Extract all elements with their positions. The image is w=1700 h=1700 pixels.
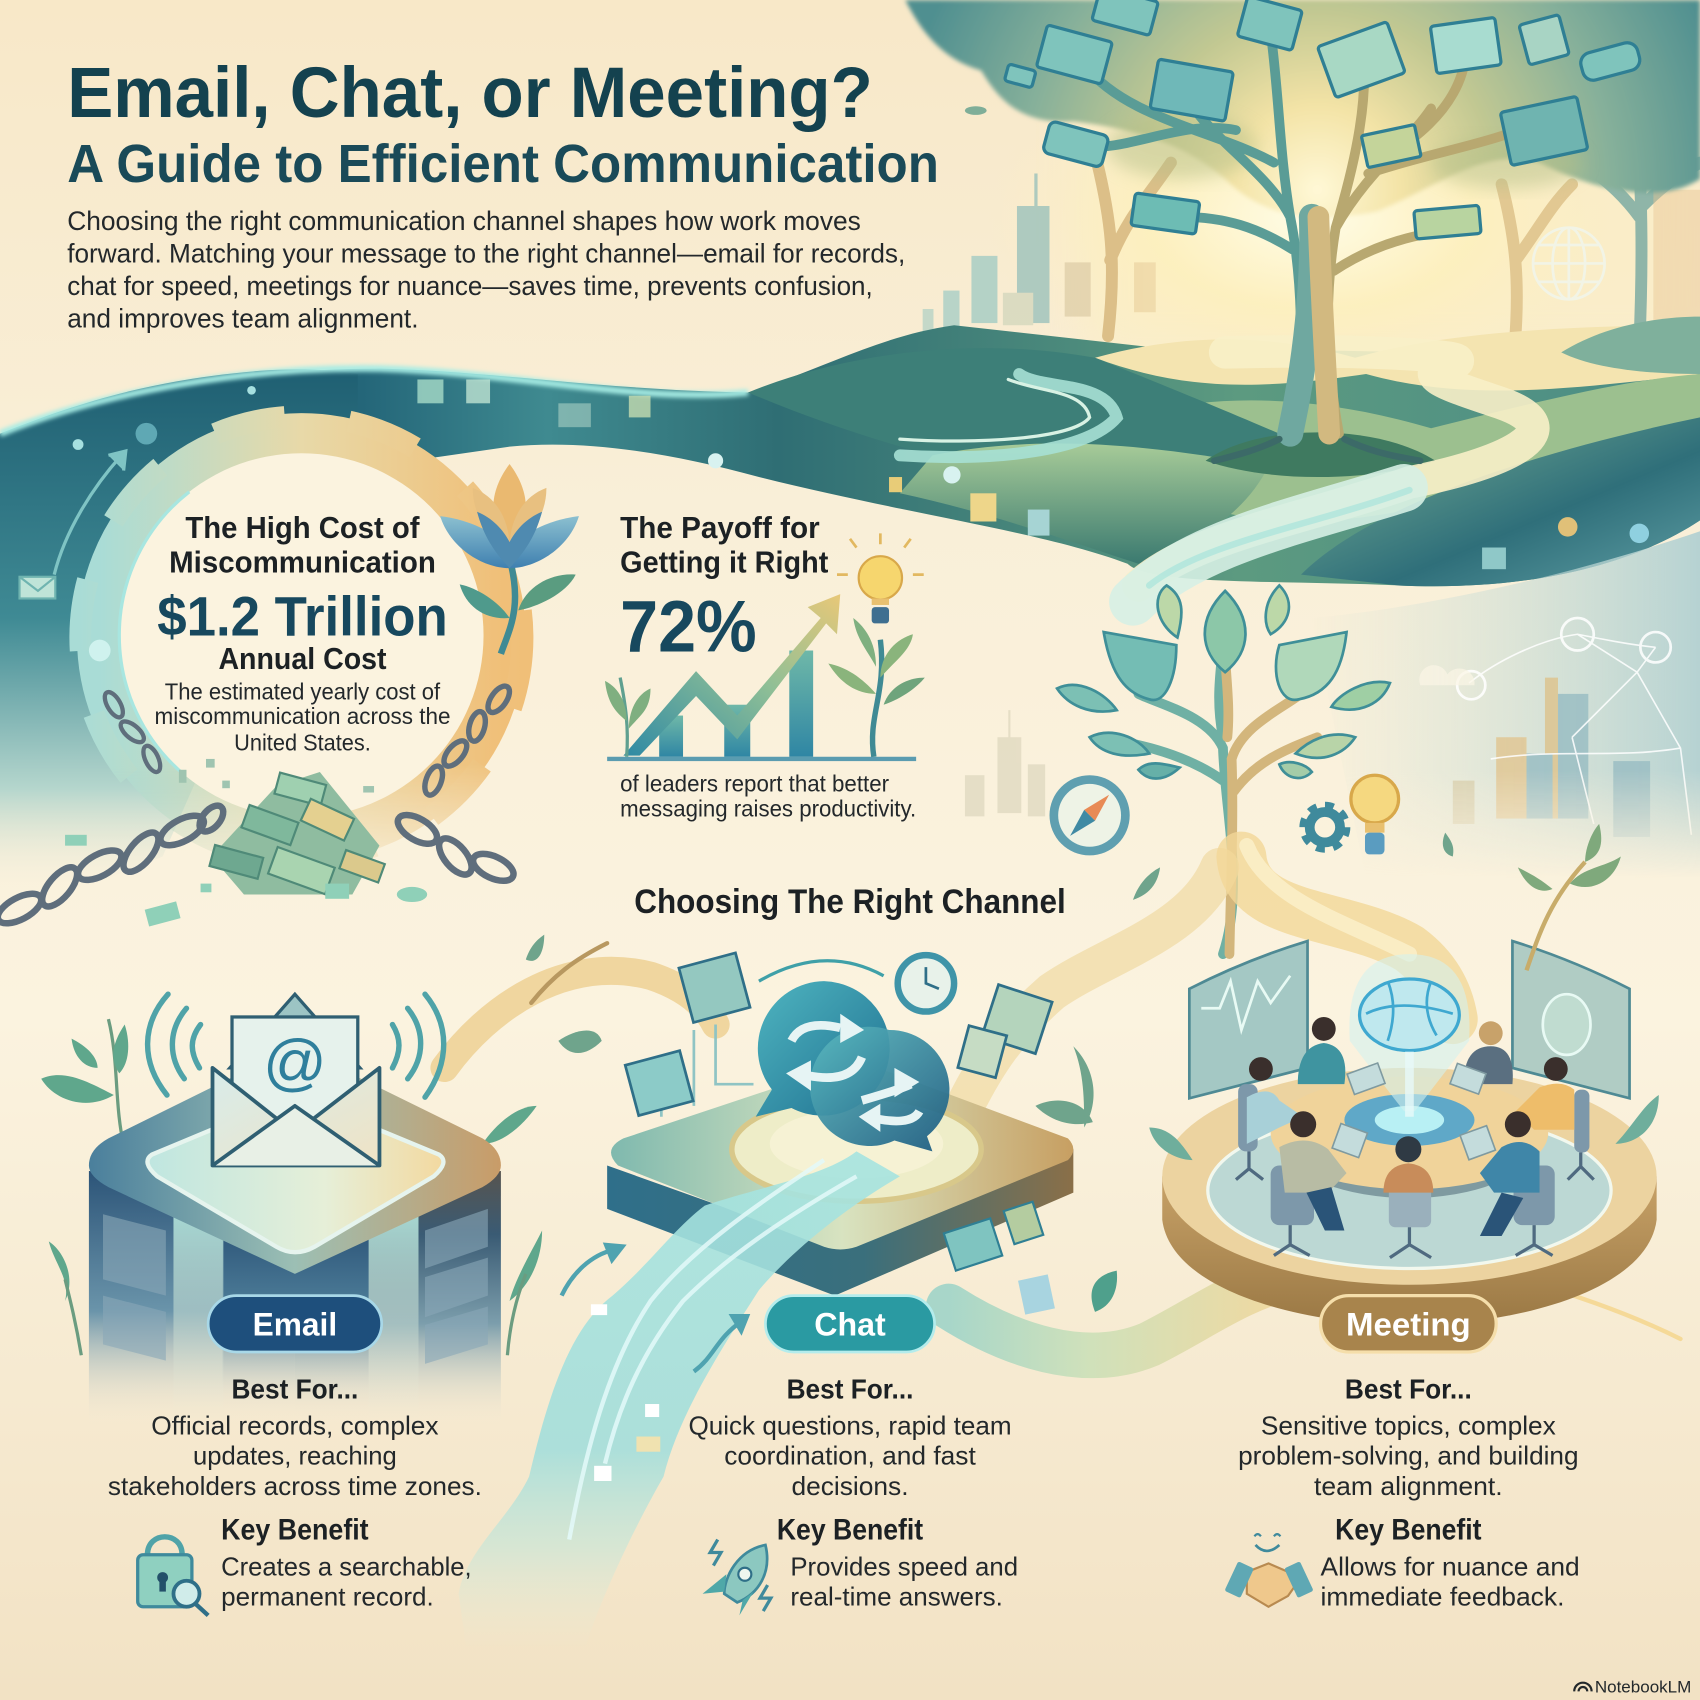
- illustration: money pile: [65, 759, 427, 927]
- illustration: data stream river: [459, 1151, 900, 1648]
- icon: ribbon and channel sprigs: [526, 833, 1453, 1312]
- icon: envelope with at sign: @: [263, 1028, 327, 1098]
- icon: light bulb: [837, 533, 924, 623]
- pill: email: Email: [253, 1307, 337, 1343]
- intro text: and improves team alignment.: [67, 302, 418, 333]
- illustration: wave band, upper data band: [163, 325, 1700, 586]
- text: meeting best for: problem-solving, and building: [1238, 1441, 1579, 1471]
- pill: meeting: Meeting: [1346, 1307, 1471, 1343]
- logo: NotebookLM: NotebookLM: [1595, 1678, 1691, 1696]
- illustration: hills: [748, 317, 1700, 586]
- illustration: flowing river through hills: [900, 352, 1533, 602]
- text: high cost panel: Miscommunication: [169, 546, 436, 579]
- intro text: [67, 205, 905, 333]
- text: high cost panel: miscommunication across the: [154, 703, 450, 729]
- pill: chat: Chat: [814, 1307, 886, 1343]
- text: email best for: [108, 1373, 482, 1501]
- icon: email sprigs: [41, 1019, 542, 1355]
- intro text: chat for speed, meetings for nuance—saves time, prevents confusion,: [67, 270, 873, 301]
- icon: lock and magnifier: [138, 1537, 208, 1615]
- text: chat best for: Best For...: [787, 1373, 913, 1405]
- intro text: Choosing the right communication channel shapes how work moves: [67, 205, 861, 236]
- text: chat key benefit: Key Benefit: [777, 1515, 923, 1547]
- icon: cog and bulb: [1303, 775, 1399, 854]
- illustration: gold ribbons: [445, 846, 1680, 1355]
- icon: flower: [440, 464, 579, 654]
- icon: rocket: [703, 1540, 771, 1615]
- illustration: distant skyline center: [965, 710, 1045, 816]
- text: meeting best for: Best For...: [1345, 1373, 1472, 1405]
- icon: sprouts: [605, 618, 925, 757]
- icon: small envelope: [20, 577, 55, 598]
- text: chat best for: decisions.: [791, 1471, 909, 1501]
- illustration: data squares and dots in band: [73, 379, 1649, 569]
- text: email key benefit: permanent record.: [221, 1582, 434, 1612]
- illustration: meeting platform: [1162, 1068, 1657, 1325]
- illustration: floating chat panels: [625, 953, 1052, 1117]
- illustration: chat platform: [607, 1065, 1073, 1315]
- text: meeting best for: [1238, 1373, 1579, 1501]
- icon: compass: [1049, 775, 1130, 855]
- illustration: leaf screens on tree: [1004, 0, 1642, 239]
- illustration: second tree leaves: [1057, 585, 1390, 779]
- intro text: forward. Matching your message to the right channel—email for records,: [67, 237, 905, 268]
- text: email best for: updates, reaching: [193, 1441, 397, 1471]
- text: payoff panel: messaging raises productivity.: [620, 795, 916, 821]
- icon: broken chains: [0, 683, 518, 929]
- text: email best for: Official records, complex: [151, 1410, 439, 1440]
- bar chart with arrow: [607, 594, 916, 761]
- text: payoff panel: 72%: [620, 585, 757, 668]
- text: chat key benefit: Provides speed and: [790, 1551, 1018, 1581]
- text: payoff panel: of leaders report that better: [620, 770, 889, 796]
- icon: meeting sprigs: [1149, 824, 1659, 1160]
- text: high cost panel: [154, 512, 450, 755]
- text: email key benefit: Key Benefit: [221, 1515, 369, 1547]
- icon: gear frame: [80, 416, 523, 859]
- pill: email: [208, 1296, 382, 1352]
- text: email key benefit: Creates a searchable,: [221, 1551, 472, 1581]
- illustration: distant trees: [1097, 119, 1700, 347]
- illustration: right pale sky, network and city: [1370, 531, 1700, 866]
- icon: envelope with at sign: [212, 994, 379, 1165]
- icon: handshake: [1224, 1534, 1314, 1607]
- icon: chat arrows by stream: [562, 1242, 750, 1371]
- text: high cost panel: Annual Cost: [218, 643, 387, 676]
- title: A Guide to Efficient Communication: [67, 134, 939, 194]
- text: payoff panel: Getting it Right: [620, 546, 828, 579]
- text: email best for: Best For...: [231, 1373, 358, 1405]
- text: chat best for: coordination, and fast: [724, 1441, 977, 1471]
- icon: globe: [1533, 228, 1605, 299]
- text: chat best for: Quick questions, rapid team: [688, 1410, 1012, 1440]
- illustration: main tree: [1084, 33, 1540, 461]
- illustration: left teal mass: [0, 368, 748, 922]
- text: meeting key benefit: Key Benefit: [1335, 1515, 1482, 1547]
- text: high cost panel: United States.: [234, 729, 371, 755]
- heading: choosing the right channel: Choosing The Right Channel: [634, 883, 1066, 921]
- text: meeting key benefit: [1321, 1515, 1580, 1612]
- text: chat key benefit: real-time answers.: [790, 1582, 1003, 1612]
- text: meeting key benefit: immediate feedback.: [1321, 1582, 1564, 1612]
- text: payoff panel: [620, 512, 916, 821]
- text: high cost panel: $1.2 Trillion: [157, 585, 448, 647]
- text: payoff panel: The Payoff for: [620, 512, 820, 545]
- illustration: canopy: [905, 0, 1700, 217]
- text: high cost panel: The estimated yearly cost of: [165, 678, 441, 704]
- text: meeting key benefit: Allows for nuance and: [1321, 1551, 1580, 1581]
- illustration: meeting side screens: [1189, 941, 1630, 1098]
- illustration: distant city skyline: [923, 173, 1156, 342]
- illustration: meeting participants: [1236, 1017, 1594, 1258]
- pill: meeting: [1321, 1296, 1496, 1352]
- text: high cost panel: The High Cost of: [185, 512, 420, 545]
- icon: gear inner disc: [119, 453, 484, 817]
- illustration: sky glow behind trees: [987, 33, 1700, 401]
- title: Email, Chat, or Meeting?: [67, 53, 873, 133]
- text: email key benefit: [221, 1515, 472, 1612]
- illustration: email server: [89, 1046, 501, 1431]
- icon: chat bubbles: [756, 981, 949, 1151]
- illustration: brain hologram: [1349, 954, 1469, 1117]
- pill: chat: [765, 1296, 935, 1352]
- text: chat key benefit: [777, 1515, 1018, 1612]
- text: chat best for: [688, 1373, 1012, 1501]
- icon: arc arrow: [54, 451, 126, 661]
- title: [67, 53, 939, 194]
- icon: signal waves: [148, 994, 444, 1097]
- text: email best for: stakeholders across time zones.: [108, 1471, 482, 1501]
- illustration: second tree: [1128, 640, 1317, 954]
- text: meeting best for: team alignment.: [1314, 1471, 1503, 1501]
- text: meeting best for: Sensitive topics, complex: [1261, 1410, 1556, 1440]
